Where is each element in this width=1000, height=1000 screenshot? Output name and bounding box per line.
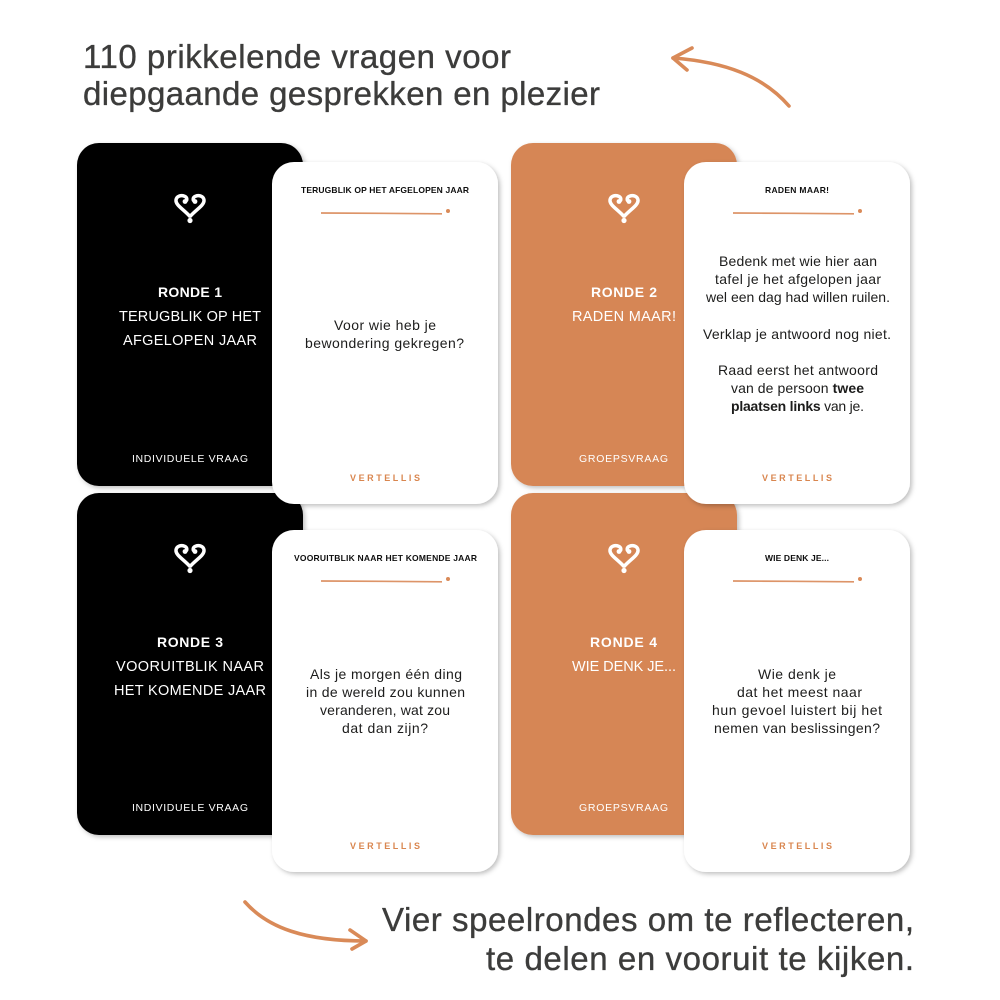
question card: vooruitblik: veranderen, wat zou	[320, 702, 450, 718]
question card: terugblik: Voor wie heb je	[334, 317, 436, 333]
card: ronde 3 black	[77, 493, 303, 835]
question card: raden maar: Verklap je antwoord nog niet.	[703, 326, 891, 342]
question card: terugblik: bewondering gekregen?	[305, 335, 464, 351]
question card: vooruitblik: VERTELLIS	[350, 841, 420, 851]
question card: raden maar: plaatsen links van je.	[731, 398, 864, 414]
card: ronde 4 orange: WIE DENK JE...	[572, 659, 676, 675]
card: ronde 3 black: RONDE 3	[157, 634, 223, 650]
question card: vooruitblik: Als je morgen één ding	[310, 666, 462, 682]
question card: raden maar: RADEN MAAR!	[765, 185, 829, 195]
card: ronde 3 black: VOORUITBLIK NAAR	[116, 659, 264, 675]
card: ronde 1 black	[77, 143, 303, 486]
question card: wie denk je: VERTELLIS	[762, 841, 832, 851]
question card: raden maar	[684, 162, 910, 504]
question card: wie denk je: dat het meest naar	[737, 684, 862, 700]
card: ronde 2 orange: RONDE 2	[591, 284, 657, 300]
card: ronde 3 black: INDIVIDUELE VRAAG	[132, 802, 248, 814]
card: ronde 4 orange: RONDE 4	[590, 634, 657, 650]
heading: top title: diepgaande gesprekken en plezier	[83, 75, 600, 112]
question card: terugblik: VERTELLIS	[350, 473, 420, 483]
question card: vooruitblik: VOORUITBLIK NAAR HET KOMENDE JAAR	[294, 553, 477, 563]
card: ronde 2 orange: RADEN MAAR!	[572, 309, 676, 325]
question card: wie denk je: nemen van beslissingen?	[714, 720, 880, 736]
question card: wie denk je: hun gevoel luistert bij het	[712, 702, 882, 718]
question card: wie denk je: WIE DENK JE...	[765, 553, 829, 563]
card: ronde 4 orange: GROEPSVRAAG	[579, 802, 668, 814]
arrow: bottom arrow pointing right	[245, 902, 366, 949]
question card: terugblik: TERUGBLIK OP HET AFGELOPEN JAAR	[301, 185, 469, 195]
question card: wie denk je: Wie denk je	[758, 666, 836, 682]
question card: raden maar: van de persoon twee	[731, 380, 864, 396]
card: ronde 2 orange	[511, 143, 737, 486]
card: ronde 1 black: INDIVIDUELE VRAAG	[132, 453, 248, 465]
question card: vooruitblik: in de wereld zou kunnen	[306, 684, 465, 700]
heading: bottom caption: te delen en vooruit te kijken.	[486, 940, 914, 977]
card: ronde 4 orange	[511, 493, 737, 835]
card: ronde 1 black: RONDE 1	[158, 284, 222, 300]
question card: vooruitblik	[272, 530, 498, 872]
card: ronde 3 black: HET KOMENDE JAAR	[114, 683, 266, 699]
card: ronde 1 black: AFGELOPEN JAAR	[123, 333, 257, 349]
heading: top title	[83, 38, 600, 112]
question card: raden maar: Bedenk met wie hier aan	[719, 253, 877, 269]
heading: top title: 110 prikkelende vragen voor	[83, 38, 511, 75]
question card: raden maar: Raad eerst het antwoord	[718, 362, 878, 378]
question card: wie denk je	[684, 530, 910, 872]
question card: terugblik	[272, 162, 498, 504]
question card: vooruitblik: dat dan zijn?	[342, 720, 428, 736]
question card: raden maar: tafel je het afgelopen jaar	[715, 271, 881, 287]
card: ronde 1 black: TERUGBLIK OP HET	[119, 309, 261, 325]
card: ronde 2 orange: GROEPSVRAAG	[579, 453, 668, 465]
question card: raden maar: VERTELLIS	[762, 473, 832, 483]
arrow: top arrow pointing left	[673, 48, 789, 106]
heading: bottom caption: Vier speelrondes om te reflecteren,	[382, 901, 914, 938]
question card: raden maar: wel een dag had willen ruilen.	[705, 289, 890, 305]
heading: bottom caption	[382, 901, 914, 977]
